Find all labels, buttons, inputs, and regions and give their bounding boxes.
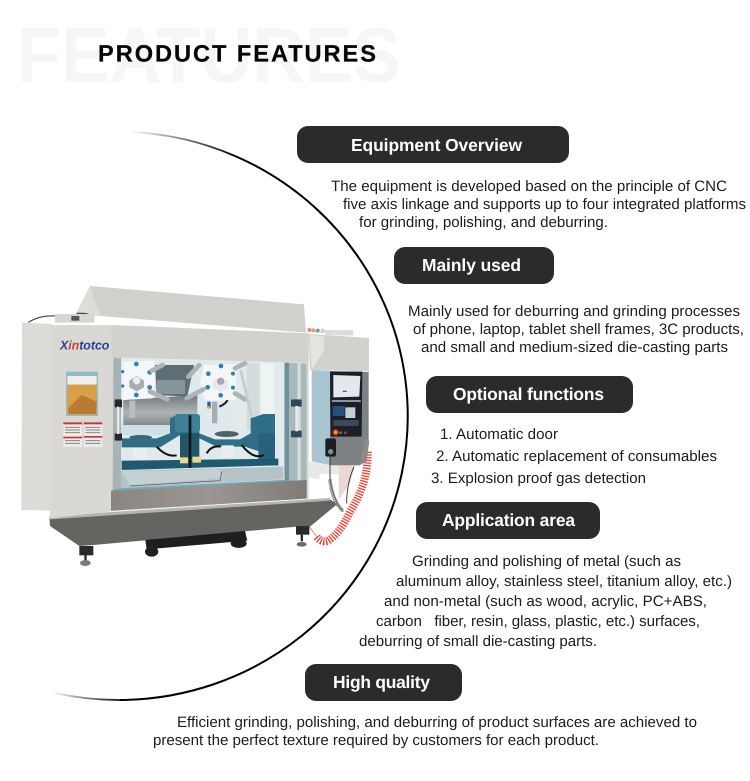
heading pill: Equipment Overview: Equipment Overview [351, 135, 522, 155]
heading pill: Mainly used: Mainly used [422, 255, 521, 275]
section: application area [359, 502, 732, 650]
heading pill: Optional functions: Optional functions [453, 384, 604, 404]
section: equipment overview [297, 126, 746, 231]
chip tray [121, 467, 283, 488]
text block: overview: The equipment is developed based on the principle of CNC [331, 178, 727, 195]
stainless lower strip [111, 480, 307, 511]
door rails [284, 363, 307, 481]
section: optional functions [426, 376, 717, 487]
text block: applications: and non-metal (such as wood, acrylic, PC+ABS, [384, 593, 707, 610]
machine base [49, 499, 337, 546]
heading pill: Equipment Overview [297, 126, 569, 163]
control panel [308, 370, 369, 500]
section: mainly used [394, 247, 744, 356]
heading pill: Application area: Application area [442, 510, 575, 530]
text block: applications: carbon fiber, resin, glass, plastic, etc.) surfaces, [376, 613, 700, 630]
support skid [145, 531, 247, 557]
product image: CNC grinding machine [21, 286, 369, 566]
front frame [50, 325, 309, 518]
blue rotary tables [122, 414, 278, 470]
text block: uses: and small and medium-sized die-casting parts [421, 339, 728, 356]
text block: overview: five axis linkage and supports up to four integrated platforms [343, 196, 746, 213]
text block: applications: aluminum alloy, stainless steel, titanium alloy, etc.) [396, 573, 732, 590]
text block: quality [153, 714, 697, 749]
info poster [66, 372, 98, 416]
heading pill: Application area [416, 502, 600, 539]
list: optional functions: 3. Explosion proof gas detection [431, 470, 646, 487]
list: optional functions [431, 426, 717, 487]
section: high quality [153, 664, 697, 749]
feet [79, 526, 309, 566]
left side wing [21, 323, 52, 511]
signal lights [307, 328, 353, 335]
text block: uses: Mainly used for deburring and grinding processes [408, 303, 740, 320]
heading pill: High quality [305, 664, 462, 701]
logo: Xintotco [59, 338, 109, 352]
list: optional functions: 1. Automatic door [440, 426, 558, 443]
heading pill: Optional functions [426, 376, 633, 413]
window interior [113, 357, 307, 491]
title: PRODUCT FEATURES [98, 42, 376, 68]
text block: quality: Efficient grinding, polishing, and deburring of product surfaces are achieved to [177, 714, 697, 731]
text block: overview [331, 178, 746, 231]
heading pill: High quality: High quality [333, 672, 430, 692]
text block: overview: for grinding, polishing, and deburring. [359, 214, 608, 231]
warning sheets [63, 422, 102, 447]
warning labels [114, 390, 298, 463]
top hood [76, 286, 306, 333]
text block: applications: deburring of small die-casting parts. [359, 633, 597, 650]
list: optional functions: 2. Automatic replacement of consumables [436, 448, 717, 465]
background watermark: FEATURES: FEATURES [17, 11, 401, 99]
heading pill: Mainly used [394, 247, 554, 284]
decorative circular arc [55, 132, 408, 700]
text block: quality: present the perfect texture required by customers for each product. [153, 732, 599, 749]
text block: uses [408, 303, 744, 356]
grinding tool magazines [121, 361, 253, 423]
right upper housing [309, 334, 369, 371]
text block: uses: of phone, laptop, tablet shell frames, 3C products, [413, 321, 744, 338]
metal block [123, 395, 197, 430]
background columns [235, 363, 285, 430]
text block: applications [359, 553, 732, 650]
text block: applications: Grinding and polishing of metal (such as [412, 553, 681, 570]
cables [309, 452, 368, 541]
